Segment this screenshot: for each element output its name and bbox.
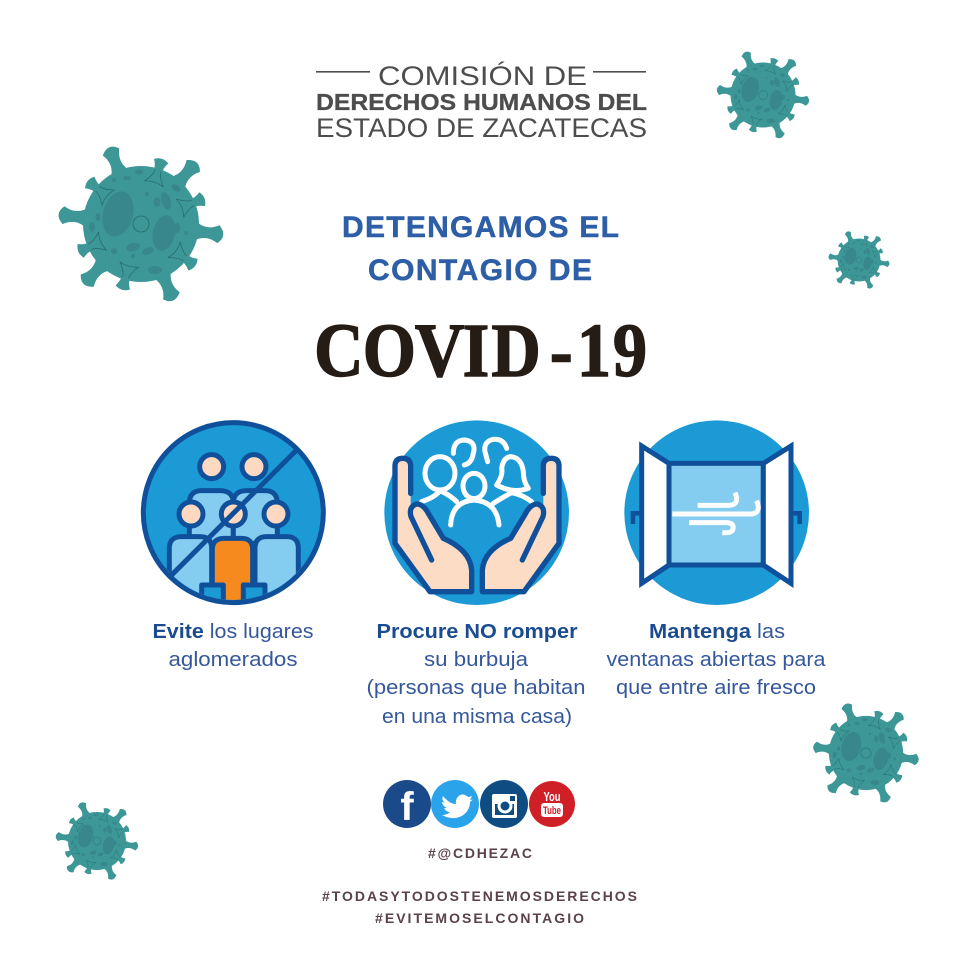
hashtags: #EVITEMOSELCONTAGIO xyxy=(375,910,584,926)
icon: youtube xyxy=(529,781,575,827)
wind xyxy=(672,493,758,533)
logo: Comisión de Derechos Humanos del Estado de Zacatecas xyxy=(316,60,647,143)
caption: evite: aglomerados xyxy=(168,649,298,671)
icon: instagram xyxy=(480,780,528,828)
caption: procure no romper: Procure NO romper xyxy=(376,621,578,643)
caption: mantenga: Mantenga las xyxy=(649,621,785,643)
virus: bottom left xyxy=(55,800,139,882)
caption: evite xyxy=(152,621,314,671)
virus: bottom right xyxy=(812,701,920,805)
people xyxy=(422,439,532,525)
icon: facebook: f xyxy=(400,785,414,829)
heading: detengamos el contagio de xyxy=(342,211,619,287)
icon: youtube: Tube xyxy=(543,805,561,817)
caption: procure no romper: su burbuja xyxy=(424,649,529,671)
logo: Comisión de Derechos Humanos del Estado de Zacatecas: COMISIÓN DE xyxy=(378,60,587,91)
left hand xyxy=(395,458,472,592)
logo: Comisión de Derechos Humanos del Estado de Zacatecas: ESTADO DE ZACATECAS xyxy=(316,113,647,143)
handle: #@CDHEZAC xyxy=(428,845,532,861)
logo: Comisión de Derechos Humanos del Estado de Zacatecas: DERECHOS HUMANOS DEL xyxy=(316,89,647,115)
title: COVID-19: COVID-19 xyxy=(314,309,647,393)
caption: mantenga: que entre aire fresco xyxy=(616,677,816,699)
social icons xyxy=(383,780,575,829)
caption: procure no romper: (personas que habitan xyxy=(366,677,586,699)
caption: procure no romper xyxy=(366,621,586,728)
caption: procure no romper: en una misma casa) xyxy=(382,706,572,728)
virus: top right xyxy=(716,49,810,141)
virus: large left xyxy=(57,142,225,306)
icon: open window with wind xyxy=(624,420,809,605)
right hand xyxy=(482,458,559,592)
heading: detengamos el contagio de: CONTAGIO DE xyxy=(368,254,592,287)
caption: mantenga xyxy=(606,621,826,699)
icon: crowded places forbidden xyxy=(143,423,323,610)
virus: small right xyxy=(828,230,890,290)
icon: youtube: You xyxy=(544,789,561,804)
heading: detengamos el contagio de: DETENGAMOS EL xyxy=(342,211,619,244)
caption: evite: Evite los lugares xyxy=(152,621,314,643)
icon: facebook xyxy=(383,780,431,829)
icon: hands holding household bubble xyxy=(384,420,569,605)
icon: twitter xyxy=(431,780,479,828)
hashtags xyxy=(322,888,637,926)
caption: mantenga: ventanas abiertas para xyxy=(606,649,826,671)
hashtags: #TODASYTODOSTENEMOSDERECHOS xyxy=(322,888,637,904)
